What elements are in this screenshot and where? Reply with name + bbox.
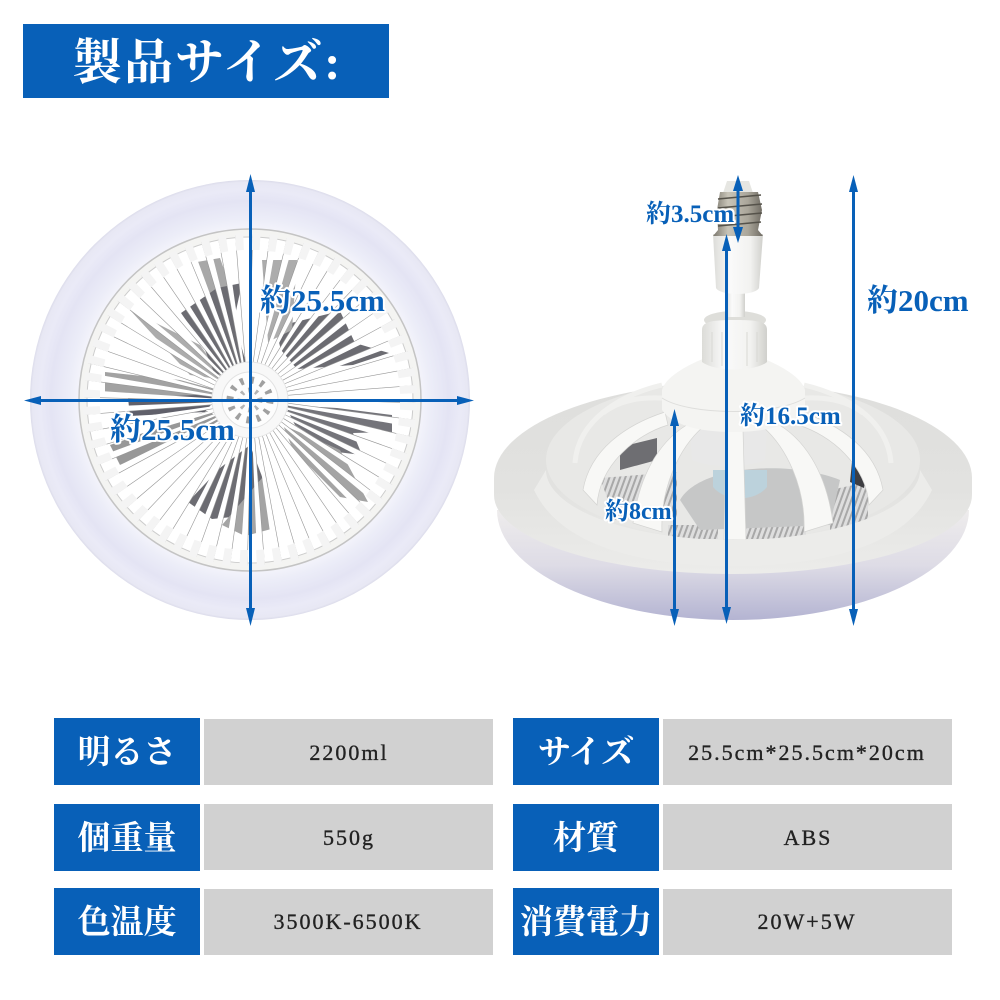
spec row: colour temperature: 色温度 [78,904,176,941]
label: 8cm: 約8cm [605,498,672,525]
grille spokes [83,233,417,567]
socket body [713,234,763,294]
stem [725,293,745,317]
spec row: colour temperature: 3500K-6500K [273,909,423,934]
spec row: power: 消費電力 [520,904,652,941]
lower diffuser [497,510,969,620]
outer rim [494,383,972,574]
label: 20cm: 約20cm [867,283,969,318]
spec row: material [513,804,952,871]
dimension arrow: 8cm [670,409,679,626]
label: height 25.5cm: 約25.5cm [260,283,385,318]
collar knob [702,311,767,370]
rim front band [534,470,932,566]
spec row: power: 20W+5W [758,909,856,934]
spec row: material: 材質 [553,820,623,857]
label: 16.5cm: 約16.5cm [740,402,841,430]
inner housing [79,229,421,571]
spec row: brightness: 明るさ [78,735,176,771]
fan interior [600,430,868,539]
title: 製品サイズ: [73,35,342,90]
motor cap [662,358,805,432]
product photo: side view of fan light [494,181,972,620]
spec row: size: 25.5cm*25.5cm*20cm [688,740,926,765]
center hub with speaker holes [212,362,288,438]
rim opening [546,380,920,540]
dimension arrow: 3.5cm [733,175,743,243]
label: width 25.5cm: 約25.5cm [110,412,235,447]
label: 3.5cm: 約3.5cm [646,200,734,228]
spec row: material: ABS [784,825,832,850]
dimension arrow: horizontal 25.5cm [24,396,474,405]
spec row: weight: 個重量 [78,820,176,857]
screw base [713,181,763,236]
dimension arrow: 20cm [849,175,858,626]
fan blades [105,258,392,536]
cage arms [583,412,883,540]
dimension arrow: 16.5cm [722,234,731,624]
rear cage loops [575,385,891,463]
spec row: brightness: 2200ml [309,740,389,765]
spec row: colour temperature [54,888,493,955]
spec row: power [513,888,952,955]
spec row: size [513,718,952,785]
spec row: size: サイズ [538,735,634,771]
spec row: weight: 550g [323,825,375,850]
outer light ring [30,180,470,620]
spec row: weight [54,804,493,871]
dimension arrow: vertical 25.5cm [246,174,255,626]
title [23,24,389,98]
product photo: top view of fan light [30,180,470,620]
spec row: brightness [54,718,493,785]
